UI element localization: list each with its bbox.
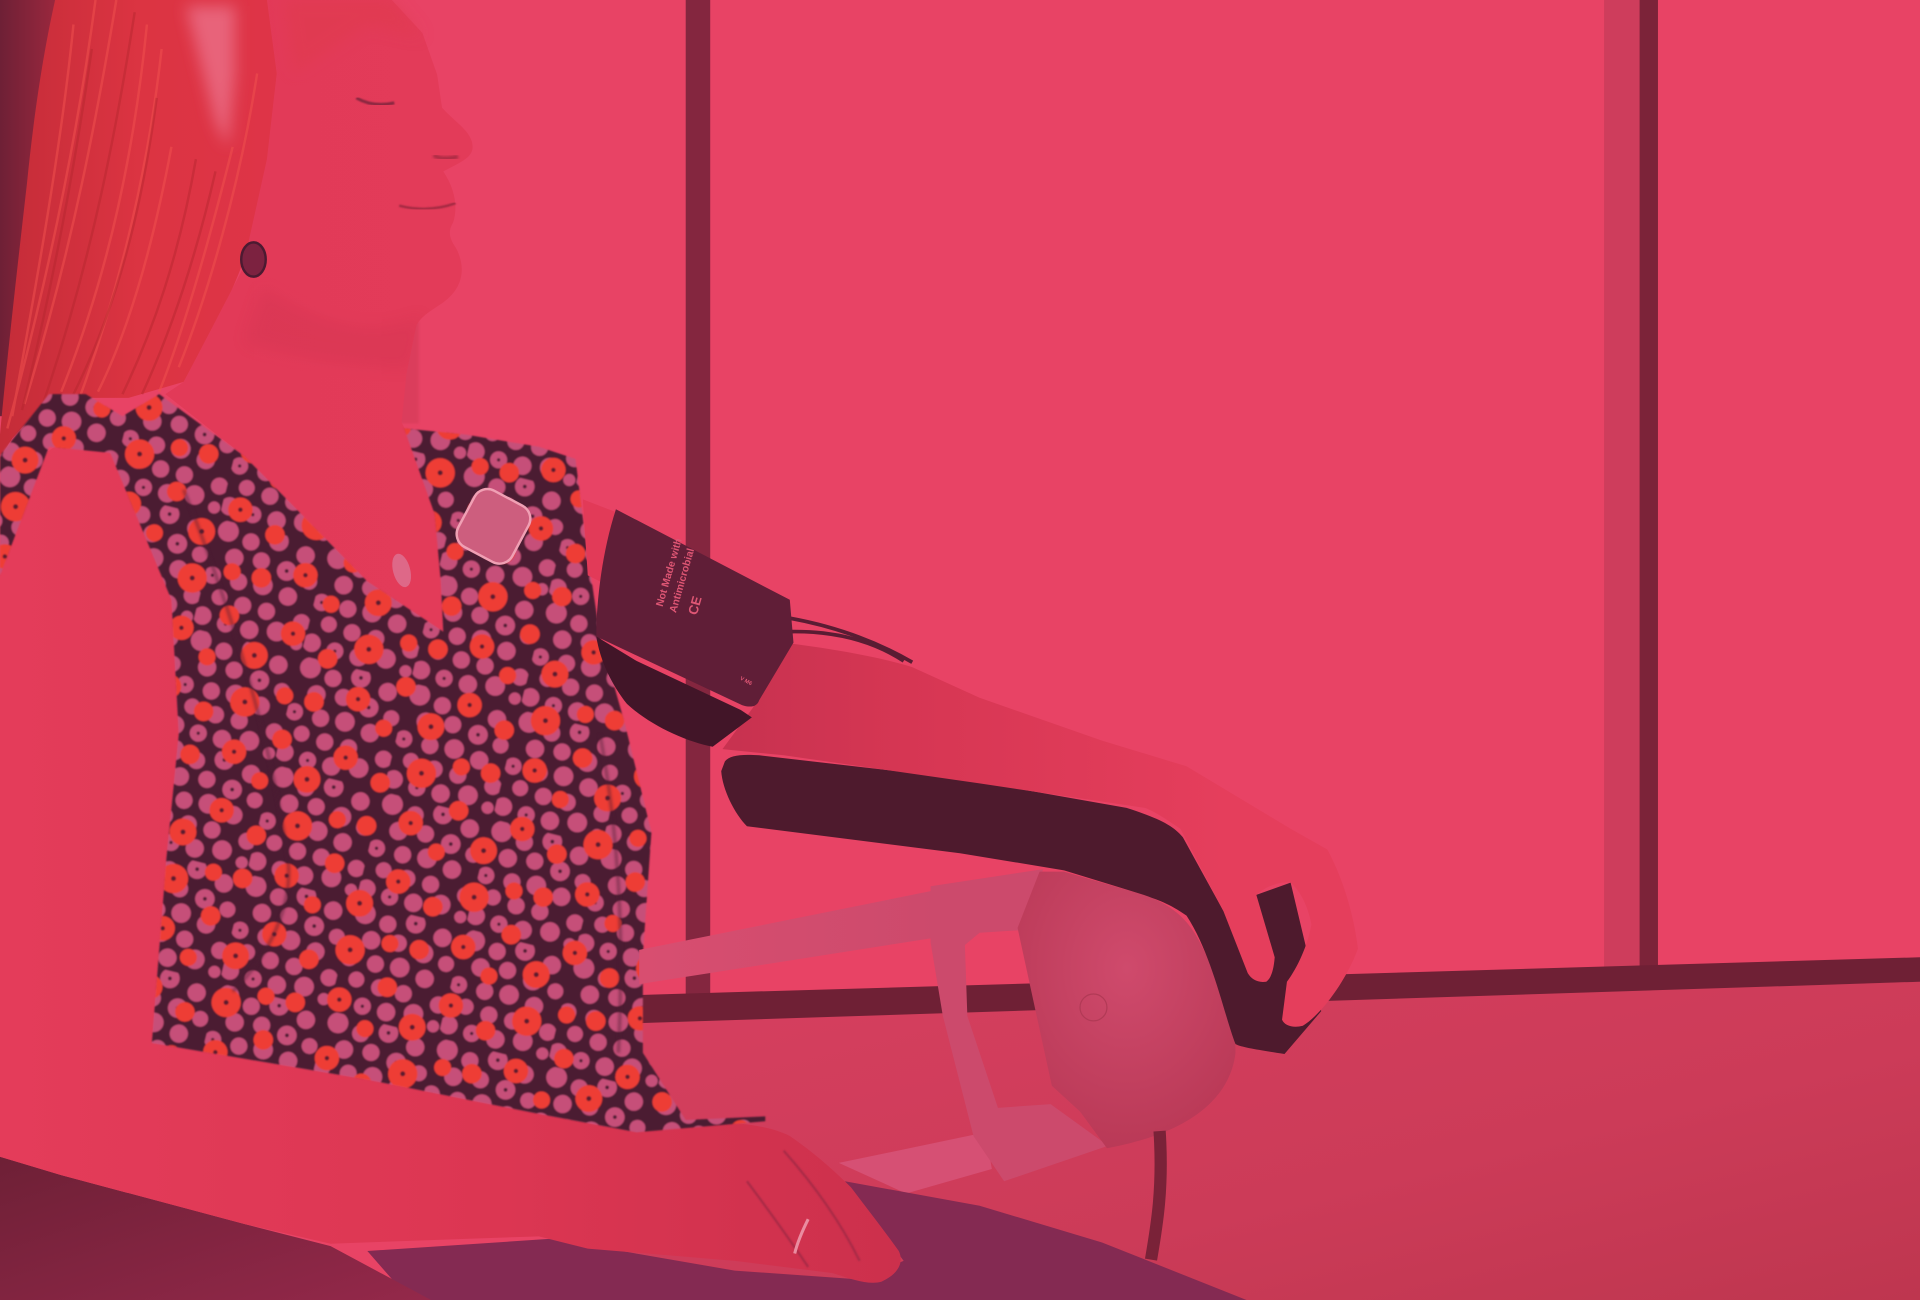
- badge: [451, 484, 535, 569]
- cuff print: CE: [685, 594, 705, 617]
- blouse ruffle folds: [184, 490, 621, 1053]
- neck shadow on window: [399, 321, 419, 424]
- jeans: [367, 1181, 1247, 1300]
- upper arm behind the cuff: [583, 499, 615, 583]
- headrest: [0, 0, 73, 416]
- machine bracket: [931, 869, 1108, 1181]
- blouse with floral print: [0, 394, 765, 1132]
- ring: [795, 1219, 808, 1253]
- cable: [1151, 1131, 1161, 1260]
- armrest pad: [721, 755, 1321, 1054]
- cuff print: Antimicrobial: [668, 547, 697, 614]
- hand fingers: [747, 1151, 860, 1267]
- closed eye: [356, 98, 394, 104]
- jaw shadow: [245, 288, 422, 367]
- left arm and forearm: [0, 443, 901, 1283]
- nostril: [433, 155, 458, 158]
- wall below the window: [612, 982, 1920, 1300]
- cuff print: [655, 537, 753, 687]
- lips: [399, 203, 456, 209]
- cuff print: Not Made with: [655, 537, 685, 608]
- chair arm foreground: [0, 1157, 431, 1300]
- hair: [0, 0, 287, 458]
- earring: [241, 242, 266, 277]
- cuff hose: [790, 618, 912, 662]
- window frame: [631, 0, 1920, 1023]
- machine arm tube: [639, 890, 943, 984]
- forearm and hand on armrest: [722, 643, 1358, 1027]
- cuff print: V M6: [739, 676, 753, 687]
- pendant: [389, 552, 414, 589]
- blood pressure cuff: [596, 509, 793, 747]
- machine body: [1018, 872, 1236, 1148]
- face and neck: [165, 0, 473, 632]
- lower machine tube: [839, 1132, 992, 1194]
- hairline wisps: [284, 0, 422, 73]
